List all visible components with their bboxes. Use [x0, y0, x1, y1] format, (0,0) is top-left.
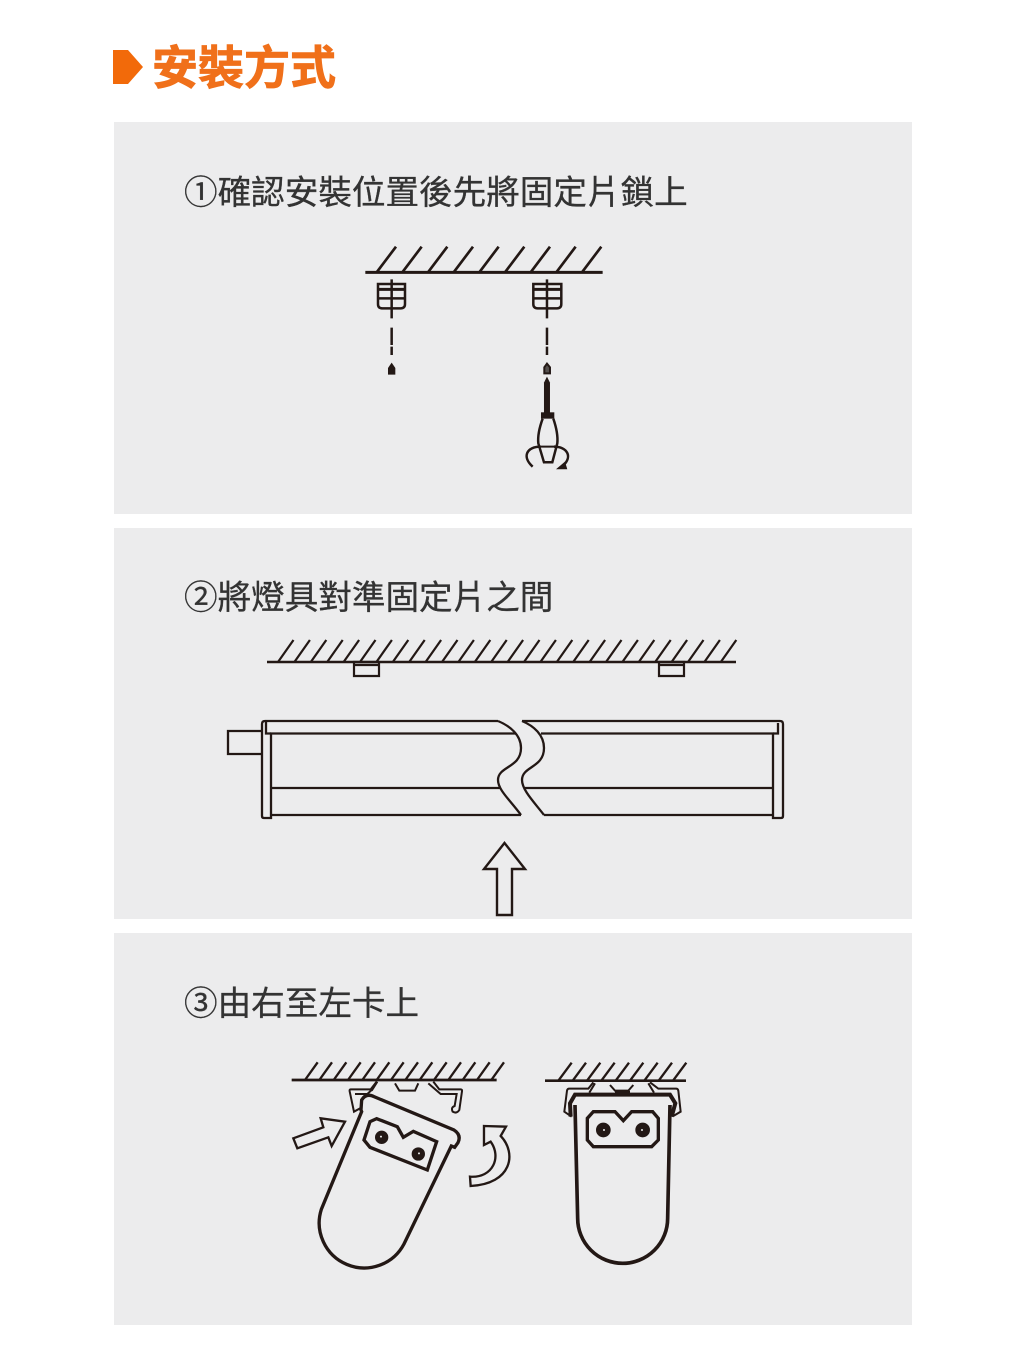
heading text: 安裝方式 [152, 42, 336, 94]
fixture body [319, 1095, 459, 1268]
panel: step 1 [114, 122, 912, 514]
step 3 instruction: ③由右至左卡上 [184, 985, 419, 1023]
diagram: ceiling with brackets [267, 640, 736, 676]
panel: step 2 [114, 528, 912, 919]
diagram: fixture clipped in [545, 1063, 686, 1263]
panel: step 3 [114, 933, 912, 1325]
step 1 instruction: ①確認安裝位置後先將固定片鎖上 [184, 174, 688, 212]
diagram: tilted fixture clipping in [292, 1062, 509, 1268]
arrow: push in [293, 1118, 345, 1148]
step 2 instruction: ②將燈具對準固定片之間 [184, 579, 553, 617]
arrow: up [484, 843, 525, 915]
diagram: light fixture with break [228, 721, 783, 818]
title [113, 42, 336, 94]
arrow: curved rotate [470, 1126, 509, 1186]
diagram: screws into ceiling [365, 247, 603, 469]
icon: orange arrow marker [113, 50, 143, 84]
